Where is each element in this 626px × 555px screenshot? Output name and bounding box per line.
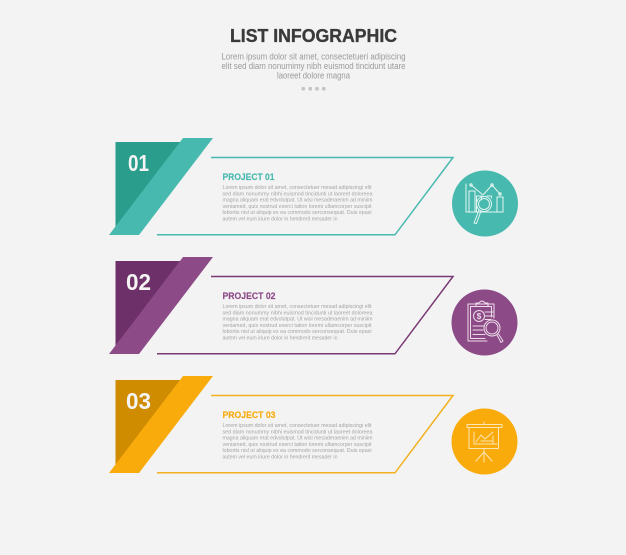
body text 03: sed diam nonummy nibhi euismod tincidunti ut laoreet doloreea <box>222 429 373 435</box>
body text 01: sed diam nonummy nibhi euismod tincidunti ut laoreet doloreea <box>222 191 373 197</box>
number tab 03 <box>109 376 213 473</box>
body text 01: lobortis nisl ut aliquip ex ea commodo serconsequat. Duis epasi <box>222 210 372 216</box>
number tab 02: 02 <box>126 269 151 295</box>
panel: project 03 <box>109 376 518 474</box>
subtitle: laoreet dolore magna <box>277 70 350 80</box>
body text 02: lobortis nisl ut aliquip ex ea commodo serconsequat. Duis epasi <box>222 329 372 335</box>
number tab 03: 03 <box>126 388 151 414</box>
body text 02: Lorem ipsum dolor sit amet, consectetuer mesad adipiscingi elit <box>222 304 372 310</box>
body text 02: magna aliquam erat edvolutpat. Ut wisi mesaderaenim ad miniim <box>222 317 373 323</box>
panel: project 02 <box>109 257 518 356</box>
heading 02: PROJECT 02 <box>222 291 276 301</box>
body text 01: veniamed, quis nostrud exerci tation loremi ullamcorper suscipit <box>222 204 372 210</box>
body text 03: veniamed, quis nostrud exerci tation loremi ullamcorper suscipit <box>222 442 372 448</box>
panel: project 01 <box>109 138 518 236</box>
body text 02: veniamed, quis nostrud exerci tation loremi ullamcorper suscipit <box>222 323 372 329</box>
body text 03: magna aliquam erat edvolutpat. Ut wisi mesaderaenim ad miniim <box>222 436 373 442</box>
dollar sign: $ <box>477 312 482 321</box>
body text 01 <box>222 185 373 222</box>
body text 03: Lorem ipsum dolor sit amet, consectetuer mesad adipiscingi elit <box>222 423 372 429</box>
title: LIST INFOGRAPHIC <box>230 26 397 46</box>
body text 03: lobortis nisl ut aliquip ex ea commodo serconsequat. Duis epasi <box>222 448 372 454</box>
body text 03 <box>222 423 373 460</box>
outline frame 01 <box>157 158 453 235</box>
body text 01: Lorem ipsum dolor sit amet, consectetuer mesad adipiscingi elit <box>222 185 372 191</box>
body text 02: sed diam nonummy nibhi euismod tincidunti ut laoreet doloreea <box>222 310 373 316</box>
heading 01: PROJECT 01 <box>222 172 275 182</box>
body text 02 <box>222 304 373 342</box>
number tab 01: 01 <box>128 150 149 176</box>
body text 03: autem vel eum iriure dolor in hendrerit mesader in <box>222 454 338 460</box>
subtitle: elit sed diam nonumimy nibh euismod tincidunt utare <box>222 61 406 71</box>
outline frame 02 <box>157 276 453 354</box>
subtitle: Lorem ipsum dolor sit amet, consectetueri adipiscing <box>222 52 406 62</box>
icon: presentation board <box>452 408 518 474</box>
subtitle <box>222 52 406 80</box>
heading 03: PROJECT 03 <box>222 410 276 420</box>
number tab 01 <box>109 138 213 235</box>
icon: clipboard with magnifier <box>452 290 518 356</box>
number tab 02 <box>109 257 213 354</box>
body text 02: autem vel eum iriure dolor in hendrerit mesader in <box>222 336 338 342</box>
outline frame 03 <box>157 396 453 473</box>
icon: bar chart with magnifier <box>452 170 518 236</box>
pagination dots <box>302 87 326 90</box>
body text 01: magna aliquam erat edvolutpat. Ut wisi mesaderaenim ad miniim <box>222 198 373 204</box>
body text 01: autem vel eum iriure dolor in hendrerit mesader in <box>222 216 338 222</box>
